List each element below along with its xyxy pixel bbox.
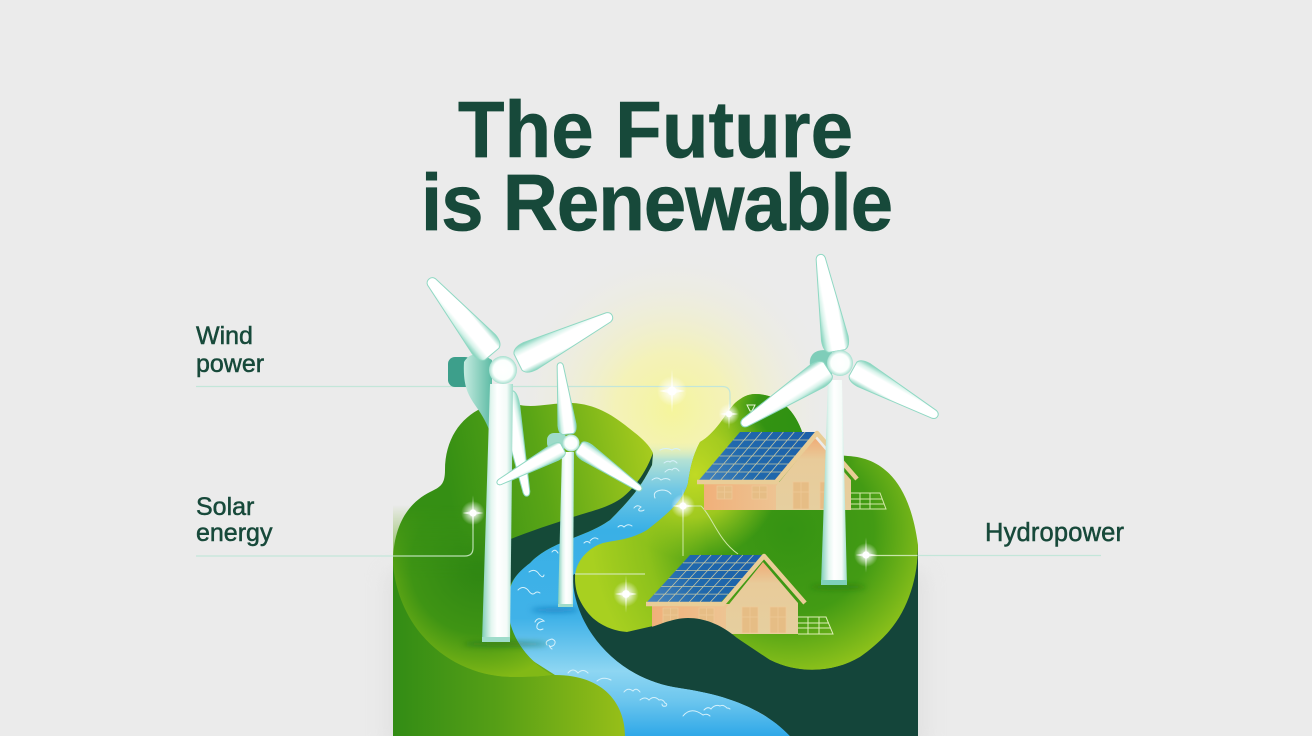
label: wind power: Wind <box>196 322 253 350</box>
lower windows <box>663 607 786 633</box>
right blade left <box>734 358 835 436</box>
tower <box>482 384 513 642</box>
small tower <box>558 452 574 607</box>
small tower base <box>558 604 573 607</box>
title <box>421 84 893 247</box>
lower solar panels <box>647 555 764 602</box>
small blade up <box>551 362 577 435</box>
right tower base <box>821 580 847 585</box>
label: solar energy: Solar <box>196 493 254 521</box>
wind turbine: small <box>493 362 647 607</box>
house upper <box>697 432 886 510</box>
back hill shade <box>732 394 856 460</box>
small blade left <box>493 441 567 491</box>
callout line: solar left stub <box>196 555 393 557</box>
label: wind power: power <box>196 350 264 378</box>
right dark land <box>573 500 918 736</box>
lower wall right <box>726 562 798 634</box>
house wall left <box>704 482 782 510</box>
nacelle <box>464 354 492 432</box>
left hill fold shading <box>393 500 553 677</box>
callout line: solar energy <box>393 515 473 556</box>
house wall right <box>776 438 851 510</box>
lower left land <box>393 555 625 736</box>
blade up-left <box>418 269 503 364</box>
small nacelle <box>547 433 567 450</box>
right blade right <box>847 358 944 428</box>
title: is Renewable <box>421 157 893 247</box>
upper callout: small panel glyph <box>747 405 755 411</box>
callout line: hydropower on land <box>868 554 918 556</box>
solar panels <box>699 432 816 480</box>
right nacelle <box>810 350 832 378</box>
title: The Future <box>458 84 853 174</box>
label: solar energy: energy <box>196 519 273 547</box>
small hub <box>562 434 580 452</box>
tower base shadows <box>463 584 866 646</box>
dark hill over lower house <box>573 545 918 736</box>
solar frame lower <box>798 617 833 634</box>
dark river bank left <box>506 453 653 590</box>
label: hydropower: Hydropower <box>985 519 1124 547</box>
right tower <box>821 380 847 585</box>
right green land <box>575 394 918 670</box>
callout line: hydropower <box>918 554 1101 556</box>
energy sparks <box>461 369 878 613</box>
rear blade <box>497 390 537 498</box>
lime bank highlight <box>646 408 768 555</box>
callout line: river to house <box>575 573 645 575</box>
blade right <box>511 302 619 375</box>
solar frame upper <box>850 493 886 509</box>
river <box>498 442 800 736</box>
left hill <box>393 403 653 677</box>
land shadow <box>385 570 927 736</box>
river ripples <box>518 448 730 716</box>
hub <box>489 356 517 384</box>
lower wall left <box>652 604 730 636</box>
nacelle rear <box>448 357 472 387</box>
wind turbine: right <box>734 252 944 585</box>
wind turbine: large left <box>418 269 619 642</box>
lower roof trim <box>646 556 805 604</box>
tower base <box>482 637 510 642</box>
right hub <box>827 350 853 376</box>
callout line: wind power <box>196 386 730 408</box>
right blade up <box>807 252 850 353</box>
callout wire: centre spark to house <box>683 506 738 556</box>
house lower <box>646 555 833 636</box>
house windows <box>717 482 836 509</box>
small blade right <box>574 440 647 497</box>
sun glow <box>507 245 837 575</box>
roof trim <box>697 433 857 482</box>
